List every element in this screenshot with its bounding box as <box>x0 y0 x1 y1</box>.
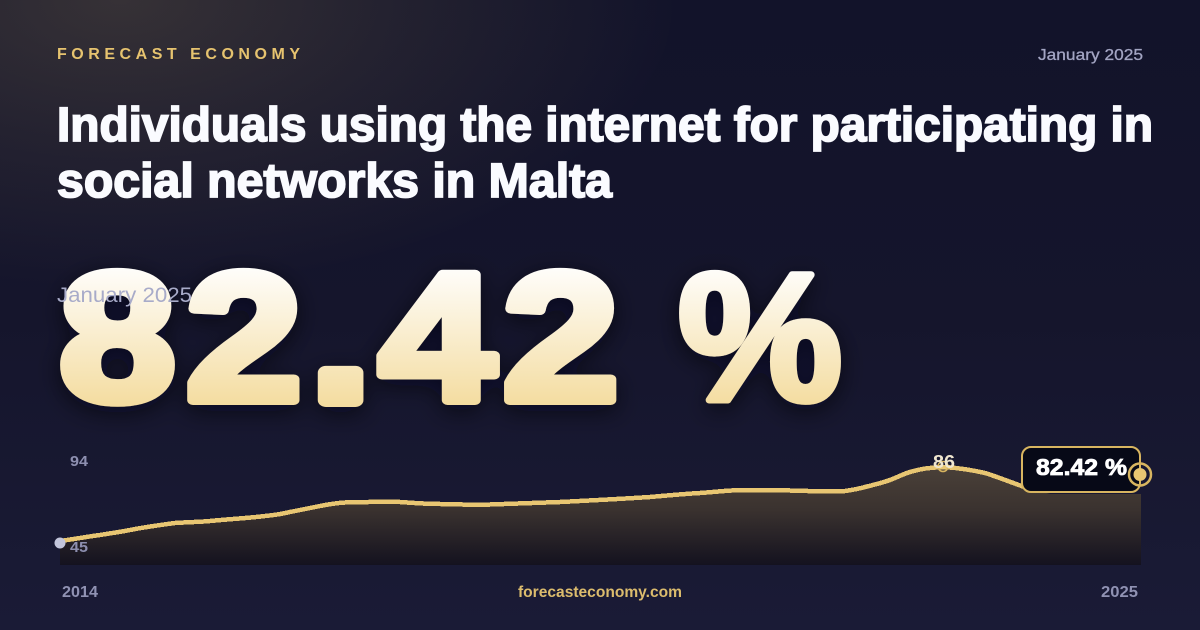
value callout: 82.42 % <box>1036 454 1127 480</box>
trend line <box>60 467 1030 541</box>
area fill <box>60 467 1141 565</box>
end point marker <box>1129 464 1151 486</box>
area chart <box>54 447 1151 565</box>
axis min: 45 <box>70 539 88 556</box>
date overlay: January 2025 <box>57 284 192 307</box>
axis max: 94 <box>70 453 89 470</box>
peak marker <box>938 462 948 472</box>
title: social networks in Malta <box>57 155 612 208</box>
peak label: 86 <box>933 451 955 472</box>
year end: 2025 <box>1101 584 1138 601</box>
start point <box>54 538 66 548</box>
value callout <box>1022 447 1140 492</box>
title: Individuals using the internet for participating in <box>57 99 1153 152</box>
brand label: FORECAST ECONOMY <box>57 46 300 63</box>
website: forecasteconomy.com <box>518 584 682 601</box>
title <box>57 99 1153 208</box>
date top right: January 2025 <box>1038 47 1143 64</box>
big value: 82.42 <box>59 235 619 439</box>
big value: % <box>678 235 842 439</box>
year start: 2014 <box>62 584 98 601</box>
